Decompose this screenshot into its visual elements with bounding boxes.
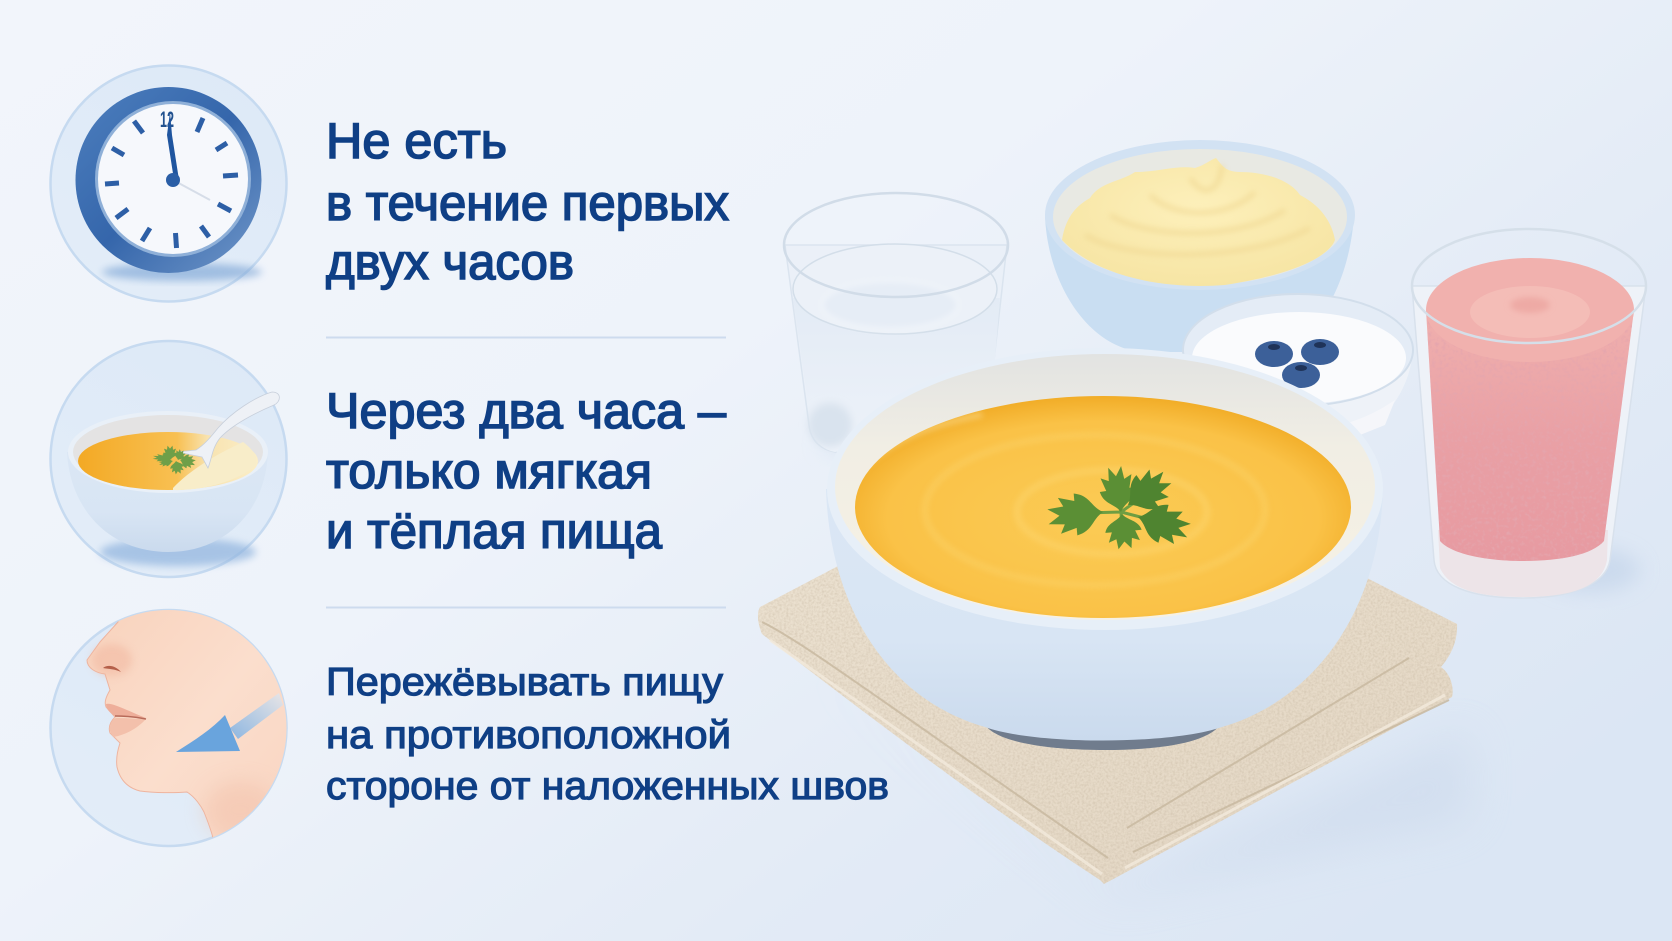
heading: no eating text: двух часов bbox=[326, 234, 574, 290]
heading: chewing text: Пережёвывать пищу bbox=[326, 661, 724, 704]
icon: smoothie glass bbox=[1412, 229, 1646, 598]
icon: clock: 12 bbox=[160, 107, 174, 132]
heading: no eating text bbox=[326, 113, 729, 290]
heading: soft food text: Через два часа – bbox=[326, 383, 726, 439]
heading: chewing text: на противоположной bbox=[326, 714, 731, 757]
heading: soft food text: и тёплая пища bbox=[326, 503, 662, 559]
icon: clock bbox=[50, 66, 286, 302]
icon: water glass bbox=[784, 193, 1008, 457]
icon: small soup bowl bbox=[50, 341, 286, 577]
icon: beige napkin bbox=[758, 565, 1470, 900]
heading: chewing text bbox=[326, 661, 889, 808]
icon: small parsley bbox=[153, 446, 197, 475]
panel: food photo illustration bbox=[758, 140, 1646, 900]
panel: rule 2 soft warm food bbox=[50, 341, 726, 577]
icon: parsley garnish bbox=[1046, 461, 1194, 550]
heading: chewing text: стороне от наложенных швов bbox=[326, 765, 889, 808]
heading: soft food text bbox=[326, 383, 726, 559]
icon: yogurt with blueberries bbox=[1183, 294, 1413, 447]
heading: no eating text: в течение первых bbox=[326, 175, 729, 231]
icon: face with arrow bbox=[49, 608, 288, 848]
panel: rule 1 no eating bbox=[50, 66, 729, 302]
icon: main soup bowl bbox=[826, 348, 1383, 750]
heading: soft food text: только мягкая bbox=[326, 443, 652, 499]
panel: rule 3 chew opposite side bbox=[50, 600, 889, 860]
icon: blueberries bbox=[1255, 339, 1339, 388]
icon: mashed potato bowl bbox=[1045, 140, 1355, 352]
heading: no eating text: Не есть bbox=[326, 113, 507, 169]
